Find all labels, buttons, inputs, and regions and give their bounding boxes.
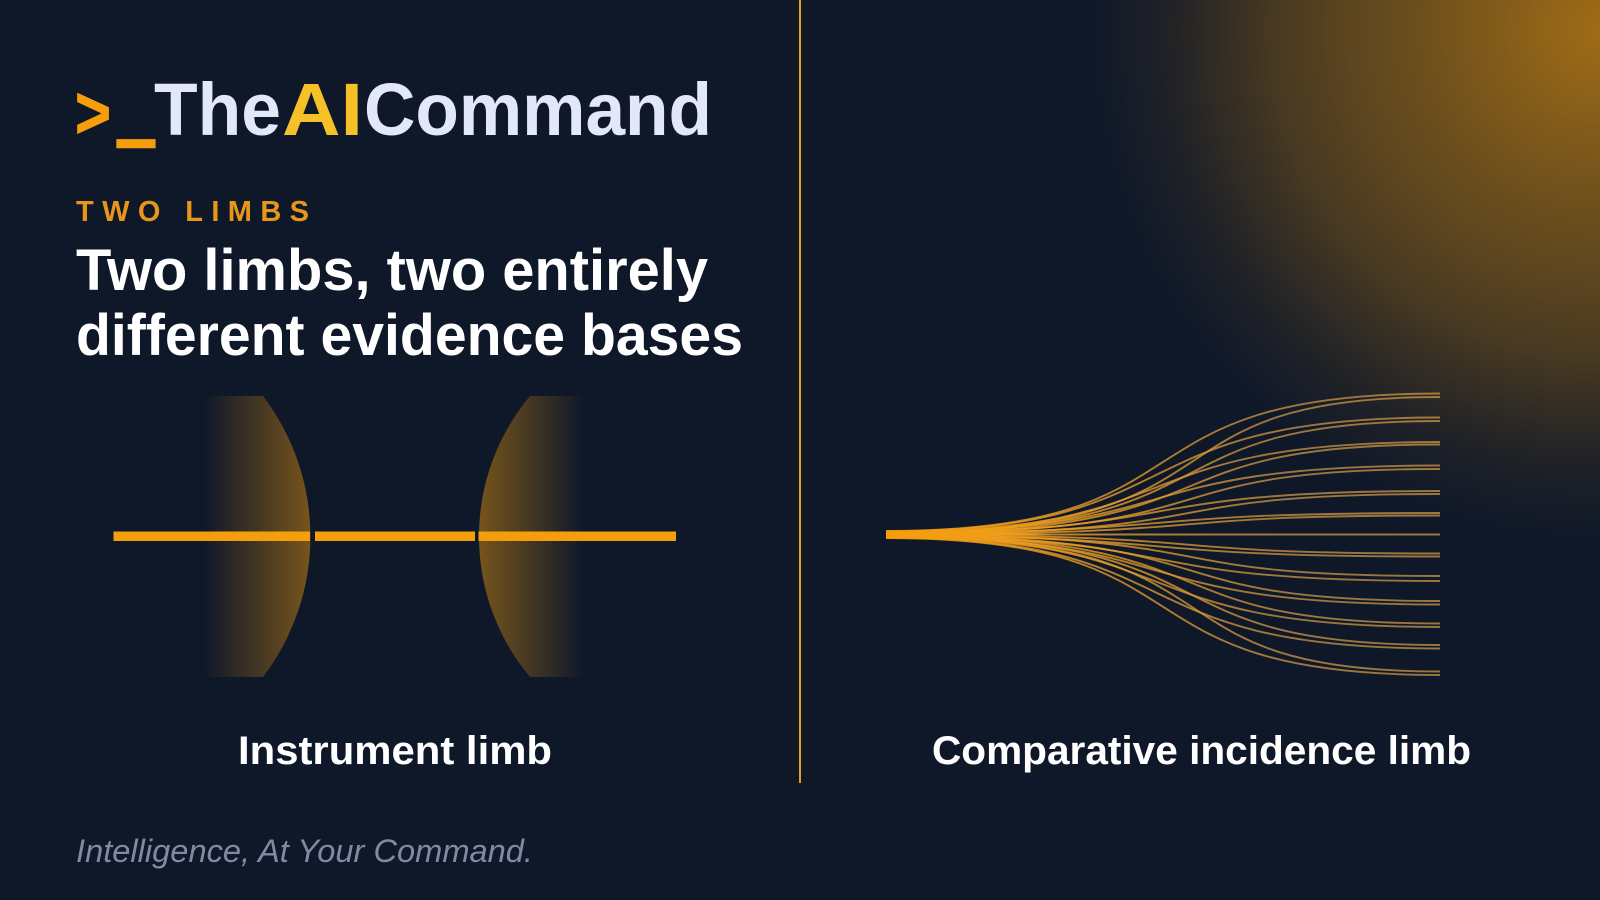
logo: TheAICommand: The — [154, 68, 281, 151]
left lens — [204, 396, 310, 677]
comparative incidence fan diagram — [886, 394, 1440, 675]
heading: Two limbs, two entirely — [76, 238, 708, 303]
heading — [76, 238, 743, 368]
instrument limb diagram — [114, 396, 676, 677]
logo: TheAICommand: AI — [282, 68, 363, 151]
vertical divider — [799, 0, 801, 783]
logo: TheAICommand: > — [75, 71, 111, 154]
logo: TheAICommand: Command — [364, 68, 712, 151]
fan trunk — [886, 530, 1050, 538]
label: Instrument limb: Instrument limb — [238, 729, 552, 773]
tagline: Intelligence, At Your Command. — [76, 833, 533, 869]
eyebrow: TWO LIMBS: TWO LIMBS — [76, 196, 309, 228]
optical axis bar — [114, 532, 676, 541]
corner glow — [1050, 0, 1600, 600]
fan strands — [886, 394, 1440, 675]
heading: different evidence bases — [76, 303, 743, 368]
right lens — [479, 396, 584, 677]
label: Comparative incidence limb: Comparative incidence limb — [932, 729, 1471, 773]
logo: TheAICommand — [75, 0, 712, 170]
